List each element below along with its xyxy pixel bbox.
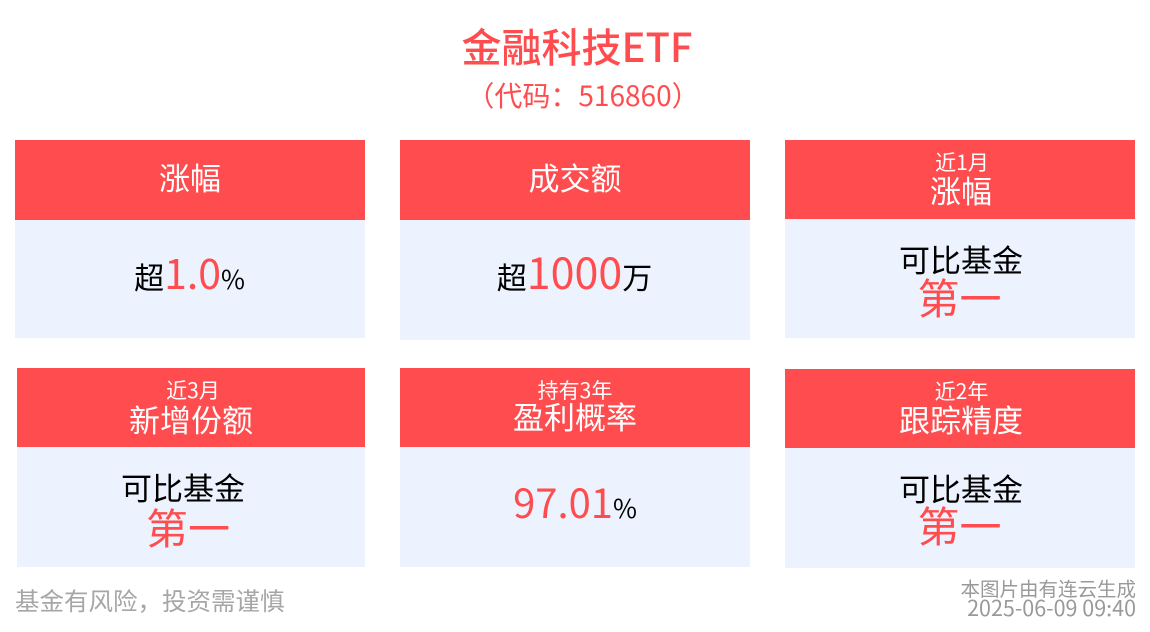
header label: 盈利概率 (513, 393, 637, 438)
title: 金融科技ETF (461, 16, 693, 74)
generated-by note and timestamp: 2025-06-09 09:40 (967, 592, 1136, 623)
panel header: one month gain (785, 140, 1135, 219)
panel value: comparable funds: 可比基金 (899, 465, 1023, 510)
panel: one month gain (785, 140, 1135, 338)
panel value: over 1.0%: 超1.0% (134, 241, 245, 301)
panel header: tracking accuracy (785, 369, 1135, 448)
panel: three month new shares (17, 368, 365, 567)
header small label: 持有3年 (538, 375, 612, 405)
panel header: new shares (17, 368, 365, 447)
header small label: 近3月 (166, 375, 220, 405)
panel value: 97.01%: 97.01% (513, 472, 637, 530)
generated-by note and timestamp (960, 573, 1136, 623)
panel header: profit probability (400, 368, 750, 447)
header label: 跟踪精度 (899, 396, 1023, 441)
panel value: first: 第一 (917, 266, 1002, 327)
header small label: 近1月 (935, 147, 989, 177)
header label: 涨幅 (159, 154, 221, 199)
panel header: gain (15, 140, 365, 220)
panel: two year tracking accuracy (785, 369, 1135, 568)
panel value: first: 第一 (917, 494, 1002, 555)
subtitle: fund code: （代码：516860） (466, 75, 700, 115)
risk disclaimer: 基金有风险，投资需谨慎 (15, 583, 284, 618)
panel header: turnover (400, 140, 750, 220)
panel value: first: 第一 (146, 496, 230, 557)
header label: 新增份额 (129, 396, 253, 441)
header label: 成交额 (528, 154, 622, 199)
panel value: comparable funds: 可比基金 (121, 464, 245, 509)
panel: daily gain (15, 140, 365, 338)
header label: 涨幅 (930, 167, 992, 212)
panel: turnover (400, 140, 750, 340)
panel value: comparable funds: 可比基金 (899, 236, 1023, 281)
panel: three year profit probability (400, 368, 750, 567)
generated-by note and timestamp: 本图片由有连云生成 (960, 573, 1136, 602)
panel value: over 10 million: 超1000万 (497, 240, 652, 302)
header small label: 近2年 (935, 376, 988, 406)
